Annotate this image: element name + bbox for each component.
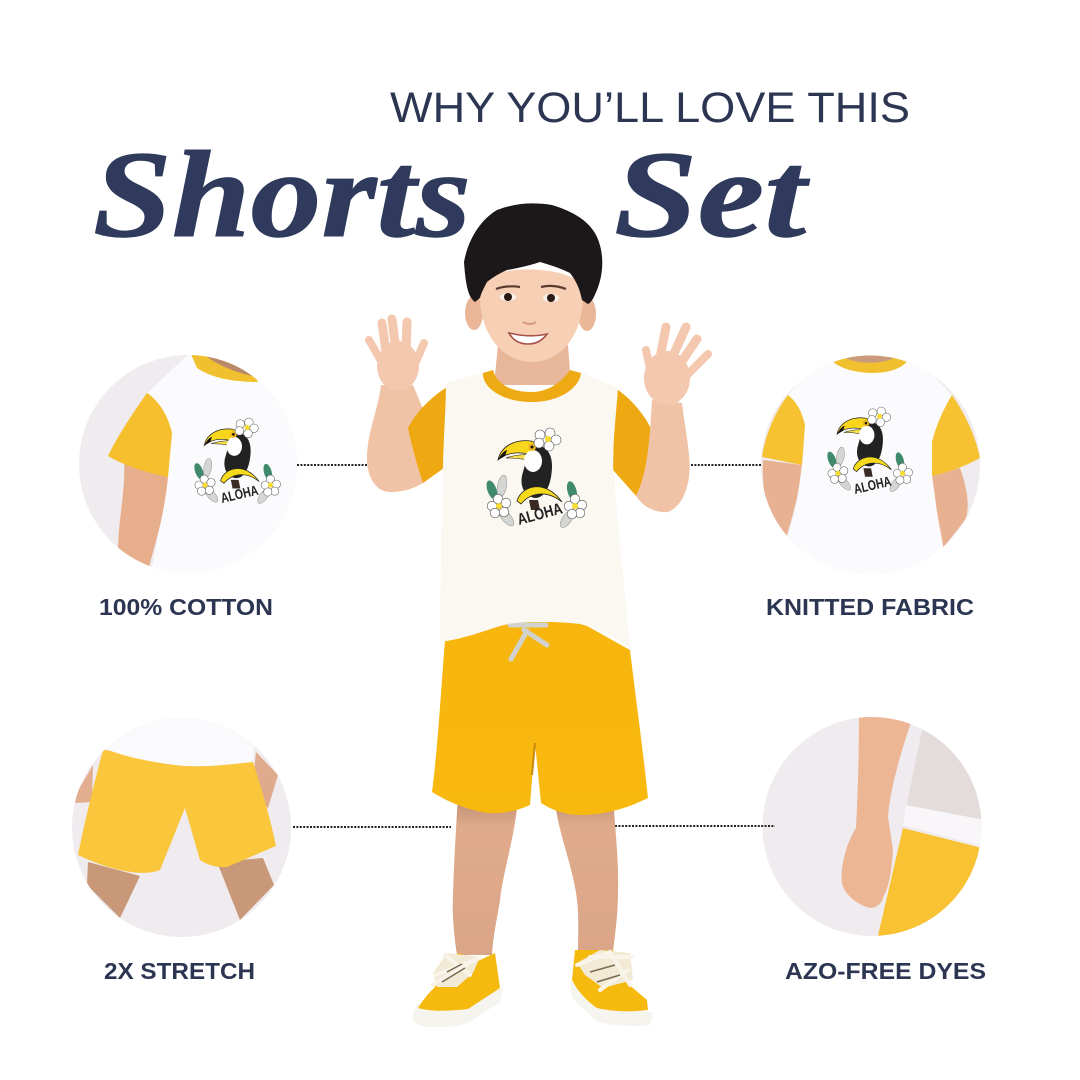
label: 100% COTTON: [99, 594, 273, 620]
right sleeve: [613, 389, 652, 497]
circle photo: shirt front with sleeve: ALOHA: [219, 482, 260, 506]
right hand: [644, 327, 708, 405]
ears: [465, 296, 483, 330]
t-shirt print: toucan: ALOHA: [516, 500, 565, 529]
heading: why you'll love this: WHY YOU’LL LOVE THIS: [390, 84, 910, 132]
left hand: [369, 319, 424, 391]
label: 2X STRETCH: [104, 958, 255, 984]
nose: [523, 322, 536, 324]
label: KNITTED FABRIC: [766, 594, 974, 620]
panel: 100% cotton: [79, 355, 281, 615]
neck: [494, 345, 571, 385]
eyes: [500, 293, 559, 302]
connector: top left: [297, 464, 367, 466]
connector: bottom right: [615, 825, 775, 827]
t-shirt body: [440, 372, 630, 648]
panel: 2x stretch: [72, 718, 291, 979]
collar: [483, 370, 581, 402]
right arm: [636, 400, 690, 512]
left sleeve: [408, 387, 448, 483]
title: Shorts Set: Shorts: [93, 126, 471, 263]
circle photo: shirt front centred: [761, 356, 980, 568]
circle photo: shirt front centred: ALOHA: [852, 473, 893, 497]
drawstring: [510, 625, 547, 659]
t-shirt print: toucan: [484, 428, 587, 530]
head: [464, 203, 602, 362]
legs: [453, 795, 618, 955]
circle photo: arm and shorts side: [762, 717, 982, 936]
panel: azo-free dyes: [755, 710, 990, 984]
title: Shorts Set: [93, 126, 810, 263]
shoe: right: [570, 950, 653, 1026]
fabric fold: [532, 743, 535, 775]
smile: [509, 333, 547, 344]
boy figure: [367, 203, 708, 1027]
shorts: [432, 622, 648, 815]
title: Shorts Set: Set: [614, 126, 810, 263]
shoe: left: [412, 953, 503, 1027]
panel: knitted fabric: [761, 356, 980, 615]
face: [480, 269, 583, 362]
left arm: [367, 385, 440, 492]
circle photo: shorts close-up: [72, 718, 291, 937]
brows: [496, 286, 520, 289]
hair: [464, 203, 602, 304]
connector: top right: [691, 464, 761, 466]
circle photo: shirt front with sleeve: [79, 355, 281, 567]
label: AZO-FREE DYES: [785, 958, 986, 984]
infographic canvas: [72, 92, 986, 1028]
connector: bottom left: [293, 826, 451, 828]
